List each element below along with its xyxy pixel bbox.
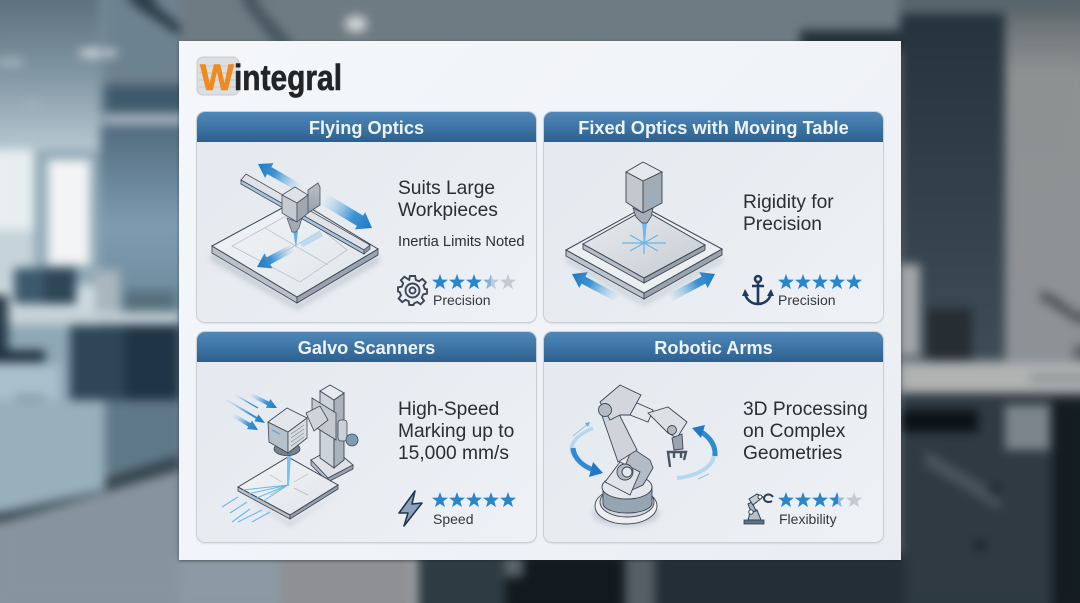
lower arm bbox=[599, 400, 653, 495]
label: Speed: Speed bbox=[433, 511, 473, 527]
panel: Robotic Arms bbox=[544, 332, 883, 542]
arrow bbox=[568, 266, 621, 306]
heading: Galvo Scanners bbox=[197, 332, 536, 362]
illustration: gantry laser over plate bbox=[209, 163, 381, 311]
heading: Fixed Optics with Moving Table bbox=[544, 112, 883, 142]
text: Suits Large Workpieces: Suits Large bbox=[398, 178, 495, 199]
rotation arrows bbox=[571, 422, 715, 479]
robot base bbox=[595, 475, 657, 524]
text: High-Speed Marking up to 15,000 mm/s bbox=[398, 399, 514, 464]
icon: small robot arm bbox=[744, 493, 774, 524]
panel: Galvo Scanners bbox=[197, 332, 536, 542]
laser head bbox=[626, 162, 662, 223]
label: Precision: Precision bbox=[433, 292, 491, 308]
stars: 5 of 5 bbox=[778, 274, 862, 290]
stand bbox=[306, 385, 358, 482]
work plate bbox=[238, 457, 338, 519]
panel: Flying Optics bbox=[197, 112, 536, 322]
motion arrows lower bbox=[222, 497, 270, 522]
rail bbox=[241, 174, 370, 254]
text: High-Speed Marking up to 15,000 mm/s: Marking up to bbox=[398, 421, 514, 442]
label: Precision: Precision bbox=[778, 292, 836, 308]
heading: Robotic Arms: Robotic Arms bbox=[654, 338, 773, 358]
main white panel bbox=[179, 41, 901, 560]
text: Rigidity for Precision: Rigidity for bbox=[743, 192, 834, 213]
text: 3D Processing on Complex Geometries: 3D Processing bbox=[743, 399, 868, 420]
heading: Robotic Arms bbox=[544, 332, 883, 362]
text: 3D Processing on Complex Geometries: Geometries bbox=[743, 443, 842, 464]
icon: anchor bbox=[742, 274, 774, 306]
logo: Wintegral: integral bbox=[234, 57, 342, 98]
label: Flexibility: Flexibility bbox=[779, 511, 837, 527]
text: 3D Processing on Complex Geometries bbox=[743, 399, 868, 464]
stars: 3.5 of 5 bbox=[778, 492, 862, 508]
logo: Wintegral bbox=[196, 56, 342, 98]
logo: Wintegral: W bbox=[200, 57, 234, 98]
heading: Galvo Scanners: Galvo Scanners bbox=[298, 338, 435, 358]
heading: Flying Optics: Flying Optics bbox=[309, 118, 424, 138]
motion arrows upper bbox=[224, 390, 279, 434]
text: High-Speed Marking up to 15,000 mm/s: 15,000 mm/s bbox=[398, 443, 509, 464]
arrow bbox=[253, 240, 297, 275]
text: 3D Processing on Complex Geometries: on Complex bbox=[743, 421, 845, 442]
icon: lightning bolt bbox=[398, 490, 423, 527]
stars: 3.5 of 5 bbox=[432, 274, 516, 290]
arrow bbox=[320, 191, 377, 237]
heading: Flying Optics bbox=[197, 112, 536, 142]
panel: Fixed Optics with Moving Table bbox=[544, 112, 883, 322]
arrow bbox=[254, 157, 304, 195]
text: Rigidity for Precision bbox=[743, 192, 834, 235]
arrow bbox=[666, 266, 719, 306]
text: Rigidity for Precision: Precision bbox=[743, 214, 822, 235]
forearm and gripper bbox=[598, 385, 687, 467]
text: High-Speed Marking up to 15,000 mm/s: High-Speed bbox=[398, 399, 499, 420]
scan head bbox=[268, 408, 307, 456]
scan beams bbox=[243, 485, 288, 502]
text: Inertia Limits Noted: Inertia Limits Noted bbox=[398, 234, 525, 250]
heading: Fixed Optics with Moving Table: Fixed Optics with Moving Table bbox=[578, 118, 849, 138]
stars: 5 of 5 bbox=[432, 492, 516, 508]
illustration: robot arm bbox=[570, 384, 718, 528]
laser burst bbox=[622, 234, 666, 254]
text: Suits Large Workpieces: Workpieces bbox=[398, 200, 498, 221]
icon: gear bbox=[397, 275, 428, 306]
illustration: fixed head above moving table bbox=[565, 162, 723, 306]
laser head bbox=[282, 183, 320, 248]
illustration: galvo scan head on stand bbox=[222, 384, 358, 526]
text: Suits Large Workpieces bbox=[398, 178, 498, 221]
